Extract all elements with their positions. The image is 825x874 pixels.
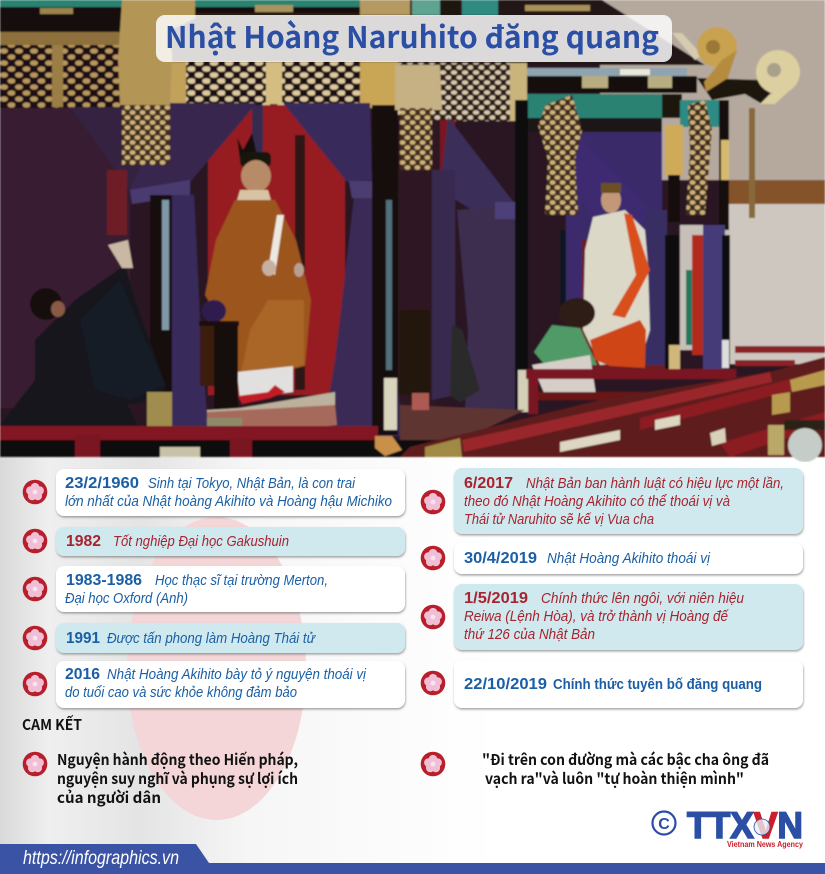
event: 1/5/2019: 1/5/2019	[464, 590, 528, 607]
commitment right	[421, 749, 769, 789]
commitment right: "Đi trên con đường mà các bậc cha ông đã	[482, 749, 769, 770]
event: 1/5/2019	[421, 584, 803, 650]
event: 30/4/2019: Nhật Hoàng Akihito thoái vị	[547, 550, 711, 567]
event: 6/2017	[421, 468, 803, 534]
event: 22/10/2019: Chính thức tuyên bố đăng quang	[553, 677, 762, 693]
event: 1991: 1991	[66, 630, 100, 647]
event: 30/4/2019: 30/4/2019	[464, 550, 537, 567]
event: 1982	[23, 527, 405, 556]
background red oval	[127, 517, 306, 820]
event: 1982: 1982	[66, 533, 101, 550]
event: 6/2017: Thái tử Naruhito sẽ kế vị Vua cha	[464, 511, 654, 528]
event: 23/2/1960	[23, 469, 405, 516]
footer band and URL	[0, 844, 825, 874]
event: 1/5/2019: thứ 126 của Nhật Bản	[464, 626, 595, 643]
roof right	[527, 33, 772, 230]
heading: commitments: CAM KẾT	[22, 714, 82, 735]
right railing	[400, 346, 825, 462]
commitment left	[23, 749, 298, 808]
commitment left: của người dân	[57, 787, 161, 808]
timeline left column	[23, 469, 405, 708]
logo: TTXVN: Vietnam News Agency	[727, 839, 803, 849]
event: 6/2017: Nhật Bản ban hành luật có hiệu lực một lần,	[526, 475, 784, 492]
event: 23/2/1960: 23/2/1960	[65, 475, 139, 492]
event: 22/10/2019	[421, 660, 803, 708]
commitment right: vạch ra"và luôn "tự hoàn thiện mình"	[485, 768, 744, 789]
event: 2016: Nhật Hoàng Akihito bày tỏ ý nguyện thoái vị	[107, 666, 367, 683]
event: 2016: do tuổi cao và sức khỏe không đảm bảo	[65, 684, 297, 701]
curtains	[130, 100, 730, 438]
event: 1991: Được tấn phong làm Hoàng Thái tử	[107, 630, 316, 647]
event: 1/5/2019: Reiwa (Lệnh Hòa), và trở thành vị Hoàng đế	[464, 608, 729, 625]
logo: TTXVN: C	[658, 816, 670, 833]
seated attendant in green	[532, 298, 597, 395]
left railing	[0, 426, 825, 457]
event: 22/10/2019: 22/10/2019	[464, 676, 547, 693]
event: 6/2017: theo đó Nhật Hoàng Akihito có thể thoái vị và	[464, 493, 730, 510]
footer band and URL: https://infographics.vn	[23, 848, 179, 869]
gold tassels	[118, 0, 712, 222]
page background	[0, 457, 825, 874]
timeline right column	[421, 468, 803, 708]
kneeling attendants in black	[0, 240, 172, 457]
Emperor Naruhito	[205, 133, 311, 404]
event: 23/2/1960: lớn nhất của Nhật hoàng Akihito và Hoàng hậu Michiko	[65, 493, 392, 510]
event: 2016	[23, 661, 405, 708]
event: 1983-1986: Đại học Oxford (Anh)	[65, 590, 188, 607]
event: 1982: Tốt nghiệp Đại học Gakushuin	[113, 533, 289, 550]
title: Nhật Hoàng Naruhito đăng quang	[165, 13, 659, 57]
photo: enthronement ceremony	[0, 0, 825, 462]
event: 23/2/1960: Sinh tại Tokyo, Nhật Bản, là con trai	[148, 475, 356, 492]
event: 2016: 2016	[65, 666, 100, 683]
roof centre	[360, 0, 705, 121]
roof left	[0, 0, 398, 108]
event: 1983-1986: 1983-1986	[66, 572, 142, 589]
event: 1/5/2019: Chính thức lên ngôi, với niên hiệu	[541, 590, 745, 607]
empress Masako	[583, 183, 650, 368]
stool	[199, 300, 239, 410]
event: 1983-1986	[23, 566, 405, 612]
commitment left: nguyện suy nghĩ và phụng sự lợi ích	[57, 768, 298, 789]
event: 30/4/2019	[421, 543, 803, 574]
platform	[207, 392, 525, 446]
event: 6/2017: 6/2017	[464, 475, 513, 492]
logo: TTXVN: TTXVN	[687, 805, 803, 846]
commitment left: Nguyện hành động theo Hiến pháp,	[57, 749, 298, 770]
event: 1983-1986: Học thạc sĩ tại trường Merton,	[155, 572, 328, 589]
wall	[600, 0, 825, 364]
gold scroll ornaments	[697, 27, 800, 218]
event: 1991	[23, 623, 405, 653]
back curtains and red drape	[0, 105, 667, 410]
